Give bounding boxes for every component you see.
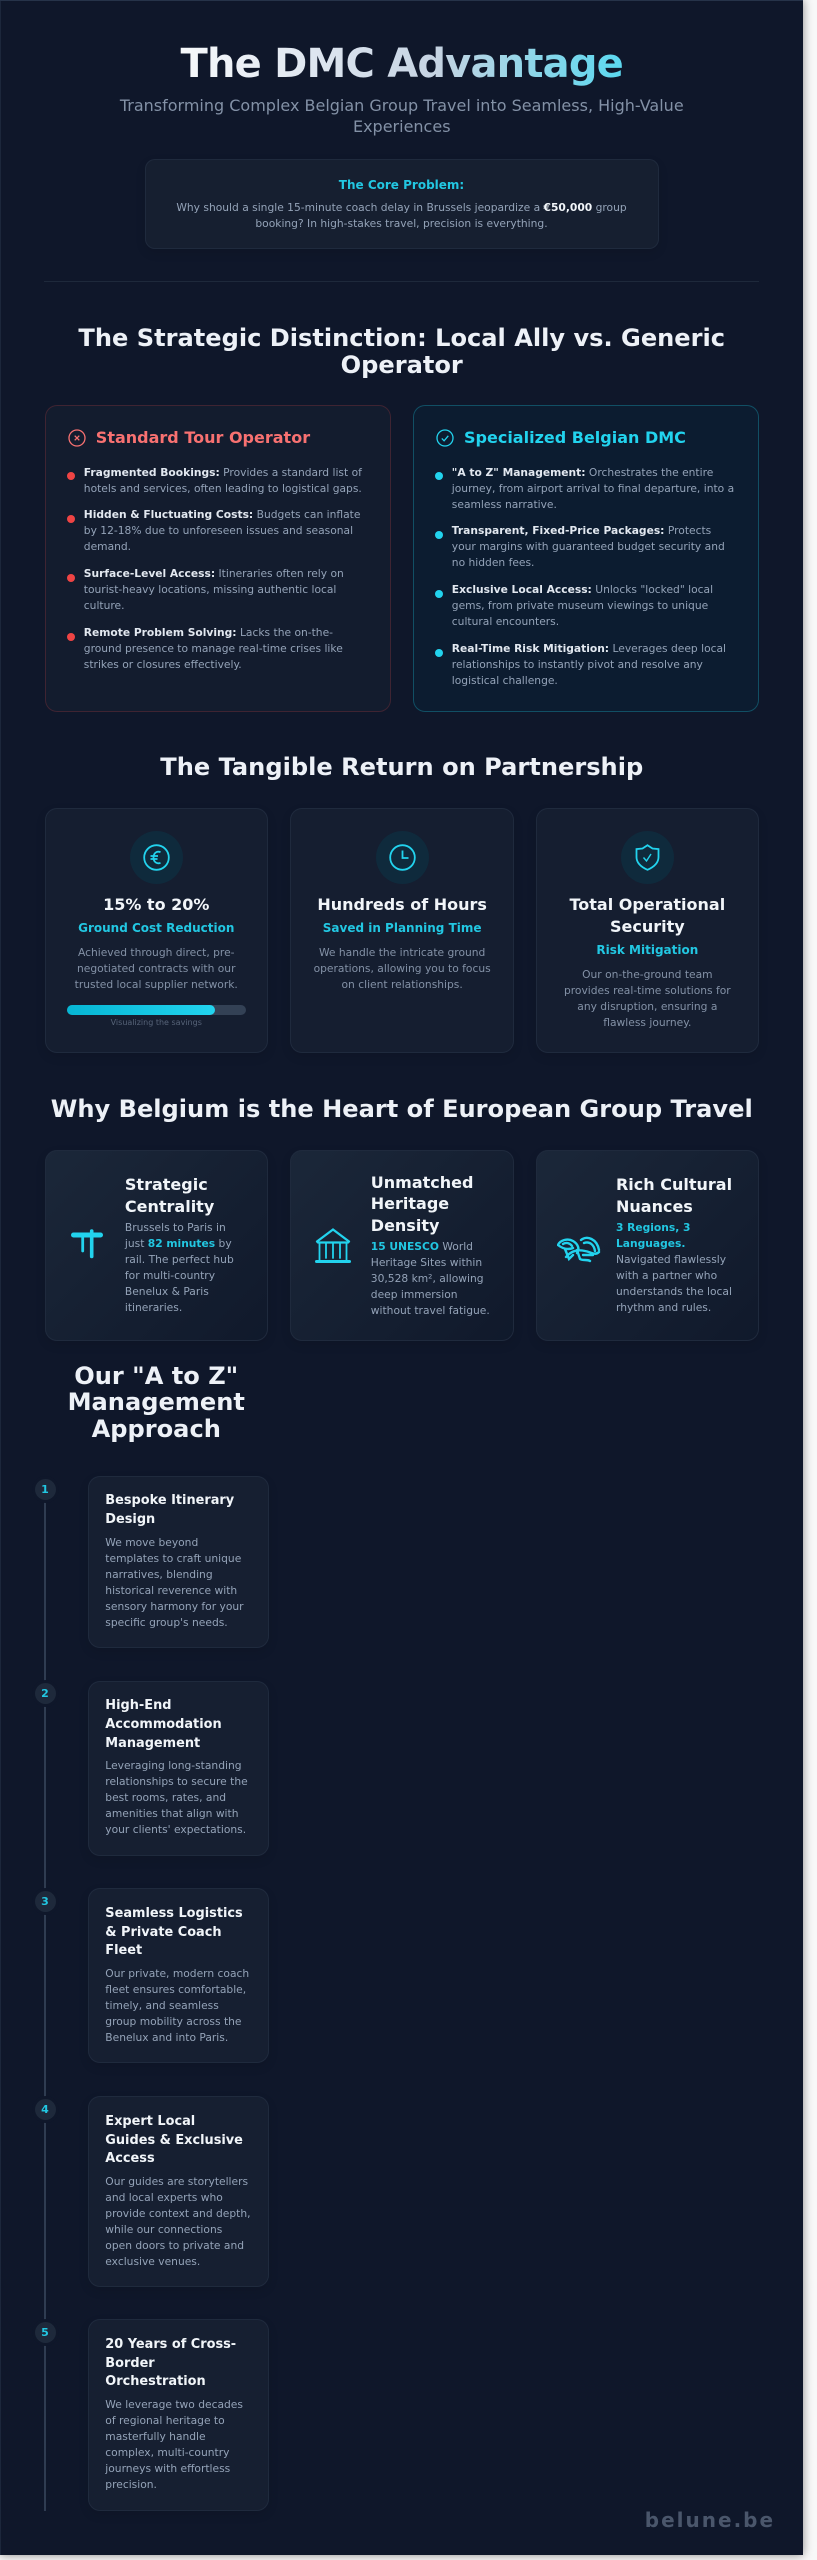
feature text: itineraries.: [125, 1301, 182, 1314]
step text: amenities that align with: [105, 1807, 238, 1820]
step text: your clients' expectations.: [105, 1823, 246, 1836]
step text: We leverage two decades: [105, 2398, 243, 2411]
list item: relationships to instantly pivot and resolve any: [452, 658, 703, 671]
bar caption: Visualizing the savings: [111, 1018, 202, 1027]
step title: Guides & Exclusive: [105, 2133, 243, 2148]
step 4 card: [88, 2096, 269, 2287]
feature text: [371, 1240, 490, 1317]
step 5 marker: [34, 2322, 56, 2343]
heading: strategic distinction: The Strategic Distinction: Local Ally vs. Generic: [78, 324, 725, 352]
step title: [105, 1906, 243, 1958]
icon: clock: [376, 831, 429, 884]
list item: journey, from airport arrival to final departure, into a: [452, 482, 734, 495]
feature text: 15 UNESCO World: [371, 1240, 473, 1253]
panel: specialized belgian dmc: [412, 405, 759, 712]
stat description: provides real-time solutions for: [564, 984, 731, 997]
heading: a to z approach: Our "A to Z": [74, 1362, 238, 1390]
icon: shield: [621, 831, 674, 884]
feature text: deep immersion: [371, 1288, 458, 1301]
list item: demand.: [84, 540, 131, 553]
step title: [105, 1493, 234, 1527]
feature card: cultural nuances: [536, 1150, 759, 1341]
panel: standard tour operator: [44, 405, 390, 712]
stat value: Hundreds of Hours: [317, 895, 487, 914]
step title: Accommodation: [105, 1717, 222, 1732]
step text: specific group's needs.: [105, 1616, 228, 1629]
subtitle: Transforming Complex Belgian Group Travel into Seamless, High-Value: [120, 96, 684, 115]
step title: Fleet: [105, 1943, 142, 1958]
icon: museum: [315, 1228, 351, 1263]
stat description: [314, 946, 491, 991]
list item: culture.: [84, 599, 125, 612]
step text: of regional heritage to: [105, 2414, 225, 2427]
list item: Exclusive Local Access: Unlocks "locked" local: [452, 583, 713, 596]
step text: templates to craft unique: [105, 1552, 241, 1565]
step title: Border: [105, 2356, 155, 2371]
stat description: trusted local supplier network.: [75, 978, 238, 991]
list item: [435, 642, 726, 687]
feature title: Rich Cultural: [616, 1175, 732, 1194]
feature text: Benelux & Paris: [125, 1285, 209, 1298]
step title: Expert Local: [105, 2114, 195, 2129]
step 1 marker: [34, 1478, 56, 1500]
step text: Our guides are storytellers: [105, 2175, 248, 2188]
title: The DMC Advantage: [180, 41, 623, 87]
step 2 marker: [34, 1683, 56, 1704]
stat description: operations, allowing you to focus: [314, 962, 491, 975]
feature text: with a partner who: [616, 1269, 717, 1282]
step title: High-End: [105, 1698, 171, 1713]
feature title: [125, 1175, 214, 1216]
stat label: Ground Cost Reduction: [78, 921, 234, 935]
list item: Fragmented Bookings: Provides a standard list of: [84, 466, 362, 479]
step text: [105, 1967, 249, 2044]
stat card: ground cost: [44, 808, 268, 1053]
step 4 marker: [34, 2099, 56, 2120]
stat description: We handle the intricate ground: [319, 946, 485, 959]
icon: signpost: [71, 1229, 103, 1258]
list item: [435, 583, 713, 628]
list item: cultural encounters.: [452, 615, 559, 628]
timeline: [35, 1479, 56, 2511]
step 3 marker: 3: [41, 1895, 49, 1908]
feature title: [616, 1175, 732, 1216]
step text: Benelux and into Paris.: [105, 2031, 228, 2044]
list item: "A to Z" Management: Orchestrates the entire: [452, 466, 713, 479]
callout text: booking? In high-stakes travel, precision is everything.: [255, 217, 548, 230]
step text: narratives, blending: [105, 1568, 213, 1581]
feature text: 30,528 km², allowing: [371, 1272, 484, 1285]
list item: [67, 626, 343, 671]
step 1 marker: 1: [41, 1482, 49, 1496]
list item: [67, 508, 360, 553]
list item: Hidden & Fluctuating Costs: Budgets can inflate: [84, 508, 360, 521]
feature title: Heritage: [371, 1194, 449, 1213]
step title: Access: [105, 2151, 155, 2166]
stat description: Our on-the-ground team: [582, 968, 713, 981]
feature title: Nuances: [616, 1197, 693, 1216]
icon: cross circle: [68, 429, 86, 447]
step title: [105, 1698, 222, 1751]
stat value: 15% to 20%: [103, 895, 209, 914]
step title: & Private Coach: [105, 1925, 222, 1940]
step text: provide context and depth,: [105, 2207, 251, 2220]
heading: a to z approach: [68, 1362, 245, 1443]
feature text: 3 Regions, 3: [616, 1221, 690, 1234]
stat card: planning time: [290, 808, 514, 1053]
heading: a to z approach: Management: [68, 1388, 245, 1416]
step 5 card: [88, 2319, 269, 2511]
list item: logistical challenge.: [452, 674, 558, 687]
list item: gems, from private museum viewings to unique: [452, 599, 708, 612]
step text: masterfully handle: [105, 2430, 206, 2443]
heading: a to z approach: Approach: [92, 1415, 221, 1443]
feature card: strategic centrality: [44, 1150, 268, 1341]
list item: Remote Problem Solving: Lacks the on-the-: [84, 626, 333, 639]
feature text: rhythm and rules.: [616, 1301, 711, 1314]
list item: [67, 567, 344, 612]
panel heading: Standard Tour Operator: [96, 428, 310, 447]
step text: complex, multi-country: [105, 2446, 229, 2459]
heading: strategic distinction: [78, 324, 725, 379]
step text: Our private, modern coach: [105, 1967, 249, 1980]
step text: [105, 1536, 244, 1629]
stat value: [570, 895, 725, 936]
stat card: risk mitigation: [536, 808, 759, 1053]
list item: [435, 524, 725, 569]
stat description: [74, 946, 238, 991]
heading: why belgium: Why Belgium is the Heart of European Group Travel: [51, 1095, 753, 1123]
list item: tourist-heavy locations, missing authentic local: [84, 583, 336, 596]
feature title: Unmatched: [371, 1172, 473, 1192]
callout text: Why should a single 15-minute coach delay in Brussels jeopardize a €50,000 group: [176, 201, 627, 214]
heading: strategic distinction: Operator: [341, 351, 463, 379]
step text: precision.: [105, 2478, 157, 2491]
step text: relationships to secure the: [105, 1775, 248, 1788]
feature text: without travel fatigue.: [371, 1304, 490, 1317]
step text: exclusive venues.: [105, 2255, 200, 2268]
list item: Real-Time Risk Mitigation: Leverages deep local: [452, 642, 726, 655]
stat label: Risk Mitigation: [596, 943, 698, 957]
stat value: Security: [610, 917, 685, 936]
step text: We move beyond: [105, 1536, 198, 1549]
feature text: for multi-country: [125, 1269, 215, 1282]
step title: Design: [105, 1512, 155, 1527]
step text: historical reverence with: [105, 1584, 237, 1597]
step text: [105, 2175, 251, 2268]
step 3 card: [88, 1888, 269, 2063]
step title: [105, 2114, 243, 2166]
list item: by 12-18% due to unforeseen issues and seasonal: [84, 524, 353, 537]
subtitle: Experiences: [353, 117, 451, 136]
step text: best rooms, rates, and: [105, 1791, 226, 1804]
step text: open doors to private and: [105, 2239, 244, 2252]
heading: tangible return: The Tangible Return on Partnership: [160, 753, 643, 781]
panel heading: Specialized Belgian DMC: [464, 428, 686, 447]
list item: your margins with guaranteed budget security and: [452, 540, 725, 553]
callout heading: The Core Problem:: [339, 178, 464, 192]
feature title: [371, 1172, 473, 1234]
stat description: negotiated contracts with our: [77, 962, 235, 975]
watermark: belune.be: belune.be: [645, 2508, 775, 2532]
step 5 marker: 5: [41, 2326, 49, 2339]
step text: Leveraging long-standing: [105, 1759, 242, 1772]
step text: [105, 1759, 248, 1836]
feature text: understands the local: [616, 1285, 732, 1298]
stat description: flawless journey.: [603, 1016, 691, 1029]
feature text: Brussels to Paris in: [125, 1221, 226, 1234]
stat label: Saved in Planning Time: [323, 921, 482, 935]
icon: cultural masks: [557, 1236, 600, 1262]
feature text: [124, 1221, 234, 1314]
list item: Surface-Level Access: Itineraries often rely on: [84, 567, 344, 580]
stat description: on client relationships.: [342, 978, 463, 991]
callout: core problem: [144, 159, 658, 249]
list item: seamless narrative.: [452, 498, 557, 511]
icon: check circle: [436, 429, 454, 447]
feature text: rail. The perfect hub: [125, 1253, 234, 1266]
feature text: Heritage Sites within: [371, 1256, 482, 1269]
step 3 marker: [34, 1891, 56, 1912]
list item: hotels and services, often leading to logistical gaps.: [84, 482, 362, 495]
step 2 card: [88, 1681, 269, 1856]
feature text: [616, 1221, 732, 1314]
step title: Bespoke Itinerary: [105, 1493, 234, 1508]
list item: Transparent, Fixed-Price Packages: Protects: [452, 524, 711, 537]
step text: journeys with effortless: [105, 2462, 230, 2475]
feature text: Navigated flawlessly: [616, 1253, 726, 1266]
list item: ground presence to manage real-time crises like: [84, 642, 343, 655]
step 1 card: [88, 1476, 269, 1648]
step text: fleet ensures comfortable,: [105, 1983, 246, 1996]
step title: [105, 2337, 236, 2389]
feature title: Strategic: [125, 1175, 208, 1194]
stat value: Total Operational: [570, 895, 725, 914]
title: [44, 40, 759, 88]
feature text: Languages.: [616, 1237, 685, 1250]
step title: Management: [105, 1736, 200, 1751]
step 4 marker: 4: [41, 2103, 49, 2116]
feature card: heritage density: [290, 1150, 514, 1341]
list item: [67, 466, 362, 495]
icon: euro: [130, 831, 183, 884]
stat description: [564, 968, 731, 1029]
feature title: Density: [371, 1216, 439, 1234]
list item: [435, 466, 734, 511]
step title: Seamless Logistics: [105, 1906, 243, 1921]
step text: and local experts who: [105, 2191, 223, 2204]
stat description: Achieved through direct, pre-: [78, 946, 234, 959]
feature text: just 82 minutes by: [125, 1237, 232, 1250]
feature title: Centrality: [125, 1197, 214, 1216]
step text: [105, 2398, 243, 2491]
subtitle: [120, 96, 684, 136]
step text: timely, and seamless: [105, 1999, 219, 2012]
stat description: any disruption, ensuring a: [577, 1000, 717, 1013]
step title: 20 Years of Cross-: [105, 2337, 236, 2352]
step title: Orchestration: [105, 2374, 206, 2389]
list item: no hidden fees.: [452, 556, 534, 569]
callout text: [176, 201, 627, 230]
step 2 marker: 2: [41, 1687, 49, 1700]
step text: group mobility across the: [105, 2015, 241, 2028]
step text: sensory harmony for your: [105, 1600, 244, 1613]
progress bar: [67, 1005, 246, 1015]
list item: strikes or closures effectively.: [84, 658, 242, 671]
step text: while our connections: [105, 2223, 222, 2236]
